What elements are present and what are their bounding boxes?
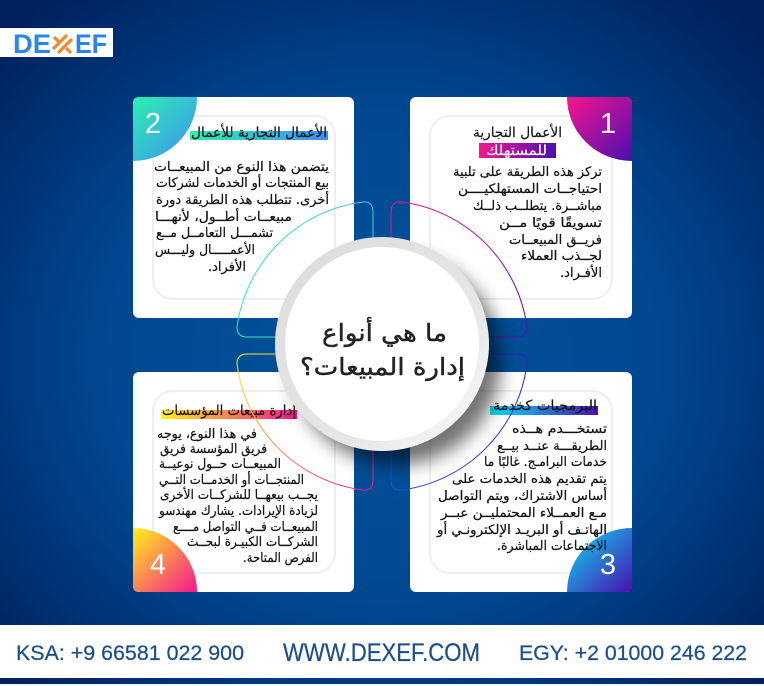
footer KSA phone: KSA: +9 66581 022 900 (16, 642, 244, 665)
card 4 body text: المبيعــات فــي التواصل مــــع (173, 520, 318, 535)
card 4 number badge (133, 528, 197, 592)
card 1 body text: احتياجــات المستهلكيــــن (458, 182, 602, 197)
card 1 heading: الأعمال التجارية (473, 123, 562, 141)
center circle with title (275, 237, 489, 451)
card 4 body text: المنتجــات أو الخدمــات التــي (159, 471, 304, 488)
card 1 background (410, 97, 632, 318)
card 1 body text: فريــق المبيعــات (509, 233, 602, 248)
card 3 body text (436, 422, 607, 554)
card 3 body text: الهاتـف أو البريـد الإلكترونـي أو (436, 521, 607, 538)
card 4 body text: لزيادة الإيرادات. يشارك مهندسو (158, 504, 318, 519)
footer website: WWW.DEXEF.COM (283, 639, 480, 667)
card 2 background (133, 97, 354, 318)
card 4 number badge: 4 (150, 549, 166, 581)
logo: DEXEF: DE (13, 29, 51, 59)
card 3 number badge: 3 (600, 549, 616, 581)
card 1 number badge: 1 (600, 108, 616, 140)
logo: DEXEF: EF (75, 29, 107, 59)
card 3 body text: مـع العمــلاء المحتمليــن عبــر (440, 506, 607, 521)
card 2 body text: يتضمن هذا النوع من المبيعــات (154, 160, 329, 175)
card 3 body text: الاجتماعات المباشرة. (497, 539, 607, 554)
connector arc: card 3 blue (391, 354, 527, 490)
card 2 body text: تشمـــل التعامــل مــع (156, 226, 273, 241)
center circle with title: ما هي أنواع (322, 317, 447, 347)
card 3 number badge (567, 528, 632, 592)
card 1 heading (473, 123, 562, 159)
card 1 body text (453, 165, 602, 281)
card 2 body text: أخرى. تتطلب هذه الطريقة دورة (156, 191, 329, 208)
footer band (0, 625, 764, 686)
card 4 body text: المبيعــات حــول نوعيــة (159, 457, 281, 472)
card 1 body text: الأفـراد. (560, 264, 602, 281)
card 1 inner border (430, 116, 612, 299)
panel: card 4 enterprise sales (133, 372, 354, 592)
card 1 body text: تسويقًا قويًا مــن (499, 216, 602, 231)
card 3 inner border (430, 391, 612, 573)
card 1 heading: للمستهلك (486, 143, 547, 159)
center circle with title: إدارة المبيعات؟ (300, 353, 465, 382)
card 3 body text: أساس الاشتراك، ويتم التواصل (438, 487, 607, 504)
panel: card 2 business to business (133, 97, 354, 318)
card 4 body text: الشركــات الكبيـرة لبحــث (187, 535, 318, 550)
card 1 number badge (567, 97, 632, 161)
connector arc: card 1 pink purple (391, 202, 527, 337)
card 3 heading: البرمجيات كخدمة (493, 398, 597, 414)
card 3 body text: تستخـــدم هــذه (512, 422, 607, 437)
card 3 body text: يتم تقديم هذه الخدمات على (452, 472, 607, 487)
card 2 body text: الأفراد. (208, 258, 246, 275)
panel: card 3 software as a service (410, 372, 632, 592)
card 2 body text (154, 160, 329, 275)
connector arc: card 2 teal (237, 202, 373, 337)
card 4 body text: الفرص المتاحة. (243, 551, 318, 566)
card 2 number badge (133, 97, 197, 161)
connector arc: card 4 yellow pink (237, 354, 373, 490)
card 1 body text: لجــذب العملاء (521, 249, 602, 264)
card 3 background (410, 372, 632, 592)
card 2 heading: الأعمال التجارية للأعمال (191, 123, 327, 141)
card 4 body text: فريق المؤسسة فريق (160, 442, 267, 457)
card 4 body text: يجــب بيعهــا للشركــات الأخرى (160, 486, 318, 503)
card 4 heading: إدارة مبيعات المؤسسات (162, 403, 296, 419)
card 3 body text: الطريقـــة عنــد بيــع (497, 439, 607, 454)
card 2 inner border (153, 116, 335, 299)
card 4 body text: في هذا النوع، يوجه (157, 427, 257, 442)
card 2 number badge: 2 (145, 108, 161, 140)
card 4 body text (157, 427, 318, 566)
card 2 body text: الأعمـــــال وليـــس (155, 241, 255, 258)
logo: DEXEF (0, 28, 113, 59)
card 2 body text: مبيعــات أطــول، لأنهـــا (155, 208, 292, 225)
center circle shadow (291, 255, 501, 465)
footer EGY phone: EGY: +2 01000 246 222 (519, 642, 747, 665)
card 1 body text: تركز هذه الطريقة على تلبية (453, 165, 602, 180)
panel: card 1 consumer business (410, 97, 632, 318)
card 3 body text: خدمات البرامـج. غالبًا ما (484, 455, 607, 470)
card 4 background (133, 372, 354, 592)
card 2 body text: بيع المنتجات أو الخدمات لشركات (156, 174, 329, 191)
card 1 body text: مباشــرة. يتطلــب ذلــك (473, 199, 602, 214)
card 4 inner border (153, 391, 335, 573)
